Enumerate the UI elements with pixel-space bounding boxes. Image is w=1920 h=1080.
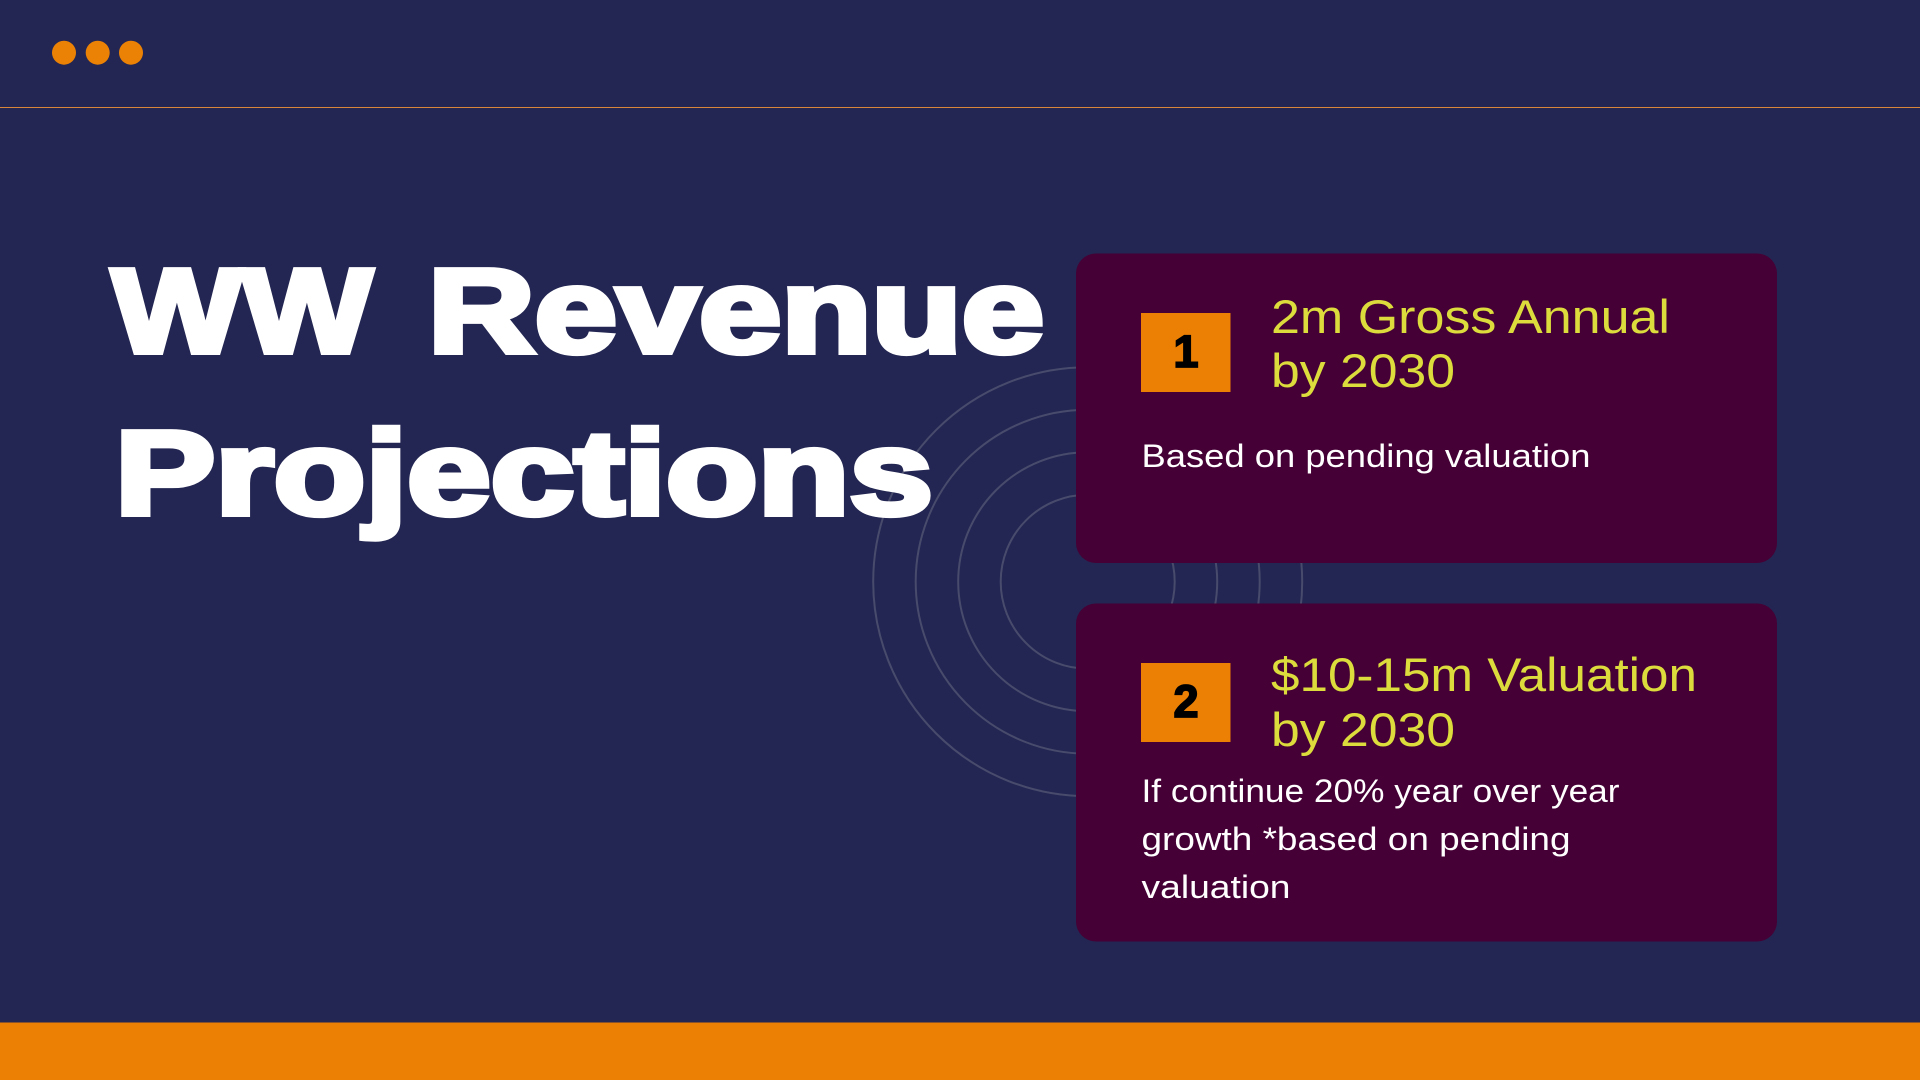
heading: valuation: $10-15m Valuation — [1271, 648, 1697, 701]
decorative concentric circles — [873, 367, 1302, 796]
body text 2: If continue 20% year over year — [1142, 773, 1620, 809]
panel: valuation — [1076, 604, 1777, 942]
title — [112, 245, 1044, 540]
body text 2: valuation — [1142, 869, 1290, 905]
body text 1: Based on pending valuation — [1142, 438, 1590, 474]
title: Revenue — [428, 245, 1044, 378]
panel: gross annual — [1076, 254, 1777, 563]
header divider — [0, 107, 1920, 108]
badge 2 — [1141, 663, 1230, 742]
heading: 2m gross annual: 2m Gross Annual — [1271, 290, 1670, 343]
heading: valuation — [1271, 648, 1697, 756]
heading: 2m gross annual — [1271, 290, 1670, 397]
title: WW — [112, 245, 373, 378]
badge 2: 2 — [1173, 676, 1199, 727]
badge 1 — [1141, 313, 1230, 392]
body text 2 — [1142, 773, 1620, 905]
header dots — [52, 41, 143, 65]
badge 1: 1 — [1173, 326, 1199, 377]
body text 2: growth *based on pending — [1142, 821, 1570, 857]
footer bar — [0, 1022, 1920, 1080]
heading: valuation: by 2030 — [1271, 703, 1455, 756]
heading: 2m gross annual: by 2030 — [1271, 344, 1455, 397]
title: Projections — [115, 407, 933, 540]
